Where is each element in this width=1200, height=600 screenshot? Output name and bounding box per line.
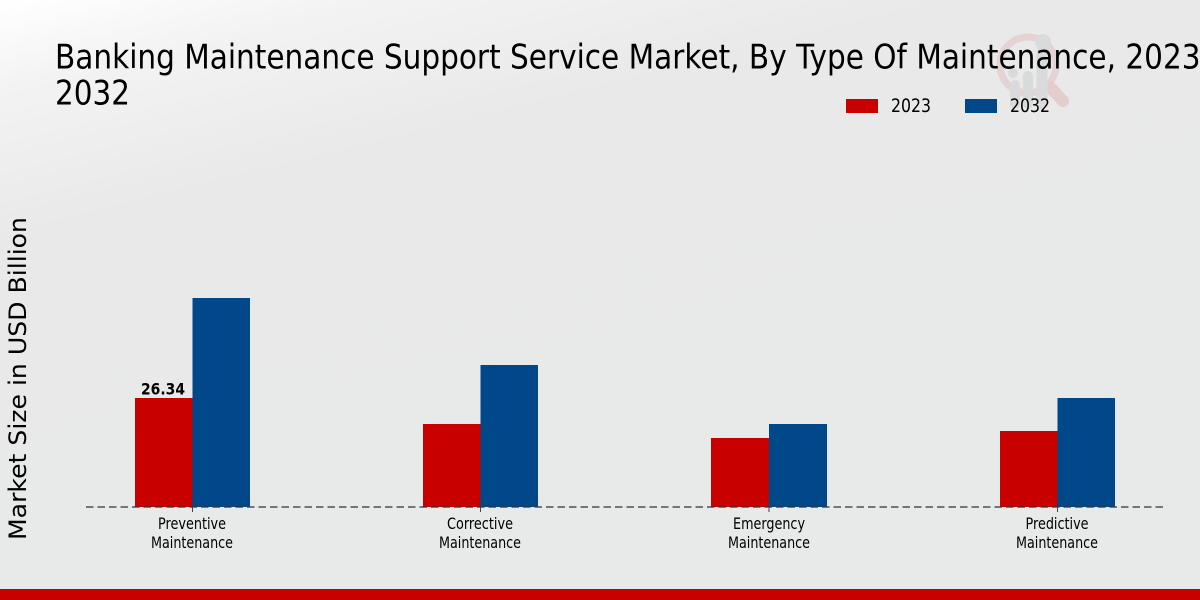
category label: Corrective Maintenance: Maintenance (439, 533, 521, 552)
legend: 2032 (1010, 95, 1050, 117)
category label: Preventive Maintenance: Maintenance (151, 533, 233, 552)
category label: Emergency Maintenance (728, 514, 810, 552)
data label: 26.34 (141, 380, 185, 398)
legend (846, 95, 1050, 117)
category label: Preventive Maintenance (151, 514, 233, 552)
bars: Corrective Maintenance (423, 365, 538, 507)
title: Banking Maintenance Support Service Market, By Type Of Maintenance, 2023 - (55, 36, 1200, 77)
bars: Preventive Maintenance (135, 298, 250, 507)
legend: 2023 (891, 95, 931, 117)
category label: Predictive Maintenance: Maintenance (1016, 533, 1098, 552)
category label: Corrective Maintenance: Corrective (447, 514, 513, 533)
title: 2032 (55, 72, 130, 113)
category label: Predictive Maintenance (1016, 514, 1098, 552)
category label: Emergency Maintenance: Maintenance (728, 533, 810, 552)
bars: Emergency Maintenance (711, 424, 827, 507)
category label: Preventive Maintenance: Preventive (158, 514, 226, 533)
y axis label: Market Size in USD Billion (4, 217, 32, 540)
axis ticks (192, 507, 1058, 512)
category label: Predictive Maintenance: Predictive (1026, 514, 1088, 533)
bars: Predictive Maintenance (1000, 398, 1115, 507)
icon: watermark logo (1000, 34, 1063, 104)
axis baseline (86, 506, 1165, 508)
footer bar (0, 589, 1200, 600)
category label: Corrective Maintenance (439, 514, 521, 552)
category label: Emergency Maintenance: Emergency (733, 514, 805, 533)
title (55, 36, 1200, 113)
bar chart (86, 298, 1165, 552)
